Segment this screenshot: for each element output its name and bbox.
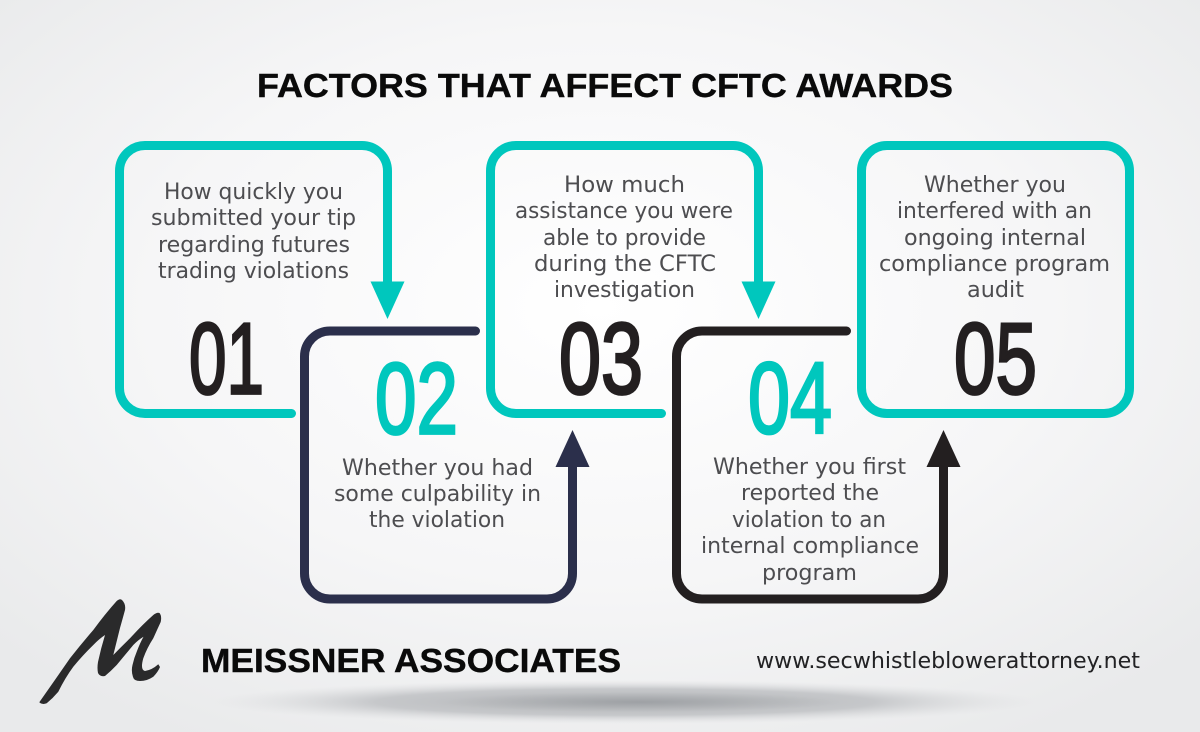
panel: step 2 bbox=[304, 331, 590, 599]
connector: step 3 outline bbox=[490, 146, 758, 414]
text: step 3 description: investigation bbox=[554, 278, 695, 303]
icon: Meissner script M logo bbox=[39, 599, 161, 704]
text: step 4 description: internal compliance bbox=[701, 534, 919, 559]
text: step 4 description: reported the bbox=[741, 481, 879, 506]
number: 04: 04 bbox=[748, 343, 832, 455]
text: step 5 description: Whether you bbox=[924, 173, 1066, 198]
text: step 1 description bbox=[151, 180, 356, 284]
text: step 5 description: interfered with an bbox=[897, 199, 1092, 224]
text: step 3 description bbox=[515, 173, 733, 303]
text: step 2 description: Whether you had bbox=[342, 456, 533, 481]
number: 05: 05 bbox=[954, 304, 1037, 416]
panel: step 5 bbox=[862, 146, 1130, 416]
text: step 2 description bbox=[334, 456, 541, 533]
text: step 1 description: regarding futures bbox=[158, 233, 350, 258]
text: step 1 description: trading violations bbox=[158, 259, 349, 284]
number: 02: 02 bbox=[375, 344, 458, 456]
panel: step 4 bbox=[676, 331, 960, 599]
connector: step 2 outline bbox=[304, 331, 572, 599]
text: step 4 description: Whether you first bbox=[713, 455, 906, 480]
text: step 3 description: How much bbox=[564, 173, 685, 198]
arrow: step 2 to step 3 bbox=[556, 430, 590, 467]
text: step 1 description: How quickly you bbox=[164, 180, 343, 205]
text: step 4 description bbox=[701, 455, 919, 586]
text: step 5 description: ongoing internal bbox=[904, 226, 1086, 251]
number: 03: 03 bbox=[559, 304, 643, 416]
panel: step 3 bbox=[490, 146, 776, 416]
text: step 3 description: during the CFTC bbox=[534, 252, 716, 277]
title: FACTORS THAT AFFECT CFTC AWARDS bbox=[257, 67, 953, 104]
arrow: step 1 to step 2 bbox=[370, 282, 404, 319]
box: step 5 outline bbox=[862, 146, 1130, 414]
floor shadow bbox=[210, 680, 1040, 724]
text: step 5 description bbox=[879, 173, 1110, 303]
text: step 2 description: some culpability in bbox=[334, 482, 541, 507]
arrow: step 4 to step 5 bbox=[926, 430, 960, 467]
text: step 2 description: the violation bbox=[369, 508, 505, 533]
text: step 5 description: compliance program bbox=[879, 252, 1110, 277]
connector: step 4 outline bbox=[676, 331, 944, 599]
text: step 3 description: able to provide bbox=[543, 226, 706, 251]
arrow: step 3 to step 4 bbox=[742, 282, 776, 319]
text: step 1 description: submitted your tip bbox=[151, 206, 356, 231]
text: step 5 description: audit bbox=[967, 278, 1024, 303]
text: step 4 description: program bbox=[762, 561, 857, 586]
connector: step 1 outline bbox=[120, 146, 388, 414]
text: step 3 description: assistance you were bbox=[515, 199, 733, 224]
number: 01: 01 bbox=[189, 304, 264, 416]
text: step 4 description: violation to an bbox=[732, 508, 886, 533]
website url: www.secwhistleblowerattorney.net bbox=[756, 649, 1140, 674]
panel: step 1 bbox=[120, 146, 404, 416]
brand name: MEISSNER ASSOCIATES bbox=[201, 642, 621, 679]
